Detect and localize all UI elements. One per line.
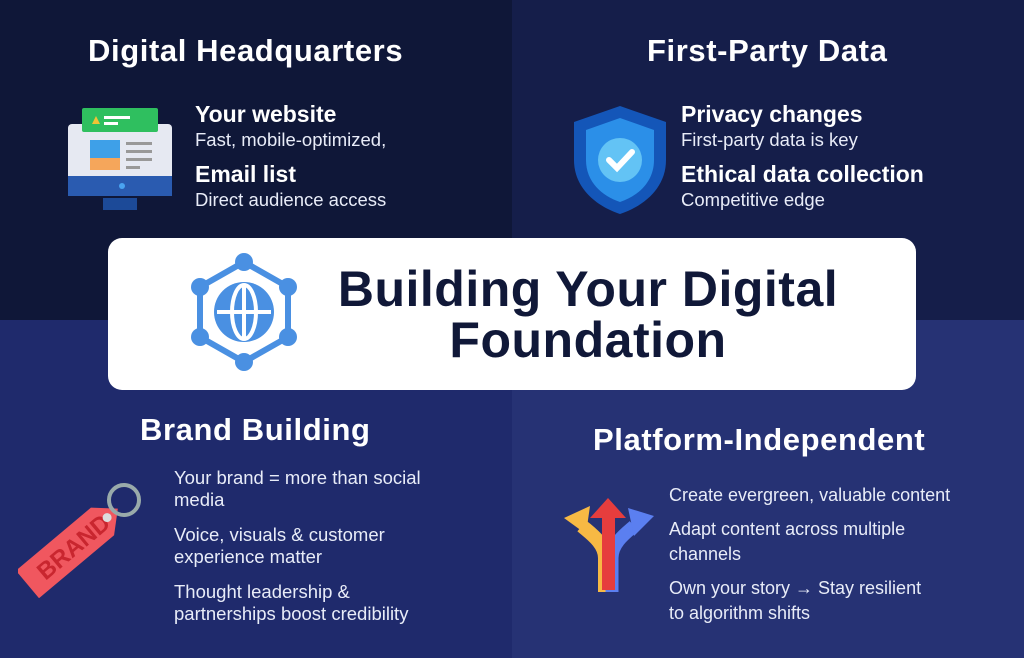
text: privacy [681, 101, 924, 210]
text: privacy: Ethical data collection [681, 161, 924, 187]
text: brand bullets: Your brand = more than social [174, 467, 421, 488]
icon: brand tag [18, 483, 141, 598]
heading: First-Party Data: First-Party Data [647, 33, 887, 68]
text: platform bullets [669, 485, 950, 623]
title text: Building Your Digital [338, 261, 838, 317]
title box [108, 238, 916, 390]
title text: Foundation [449, 312, 727, 368]
heading: Digital Headquarters: Digital Headquarters [88, 33, 403, 68]
text: brand bullets: media [174, 489, 224, 510]
icon: brand tag: BRAND [32, 509, 116, 586]
text: website and email [195, 101, 386, 210]
icon: globe network [191, 253, 297, 371]
text: brand bullets: Thought leadership & [174, 581, 350, 602]
text: privacy: First-party data is key [681, 129, 858, 150]
text: platform bullets: Create evergreen, valuable content [669, 485, 950, 505]
text: brand bullets [174, 467, 421, 624]
icon: monitor [68, 108, 172, 210]
heading: Platform-Independent: Platform-Independent [593, 422, 925, 457]
text: platform bullets: channels [669, 544, 741, 564]
title text [338, 261, 838, 368]
icon: shield [574, 106, 666, 214]
icon: split arrows [564, 498, 654, 592]
text: platform bullets: to algorithm shifts [669, 603, 810, 623]
text: website and email: Your website [195, 101, 336, 127]
heading: Brand Building: Brand Building [140, 412, 371, 447]
text: website and email: Email list [195, 161, 296, 187]
text: website and email: Direct audience access [195, 189, 386, 210]
text: brand bullets: experience matter [174, 546, 322, 567]
text: privacy: Competitive edge [681, 189, 825, 210]
text: brand bullets: Voice, visuals & customer [174, 524, 385, 545]
text: platform bullets: Own your story → Stay resilient [669, 578, 921, 598]
text: brand bullets: partnerships boost credibility [174, 603, 408, 624]
text: website and email: Fast, mobile-optimized, [195, 129, 386, 150]
text: platform bullets: Adapt content across multiple [669, 519, 905, 539]
text: privacy: Privacy changes [681, 101, 863, 127]
